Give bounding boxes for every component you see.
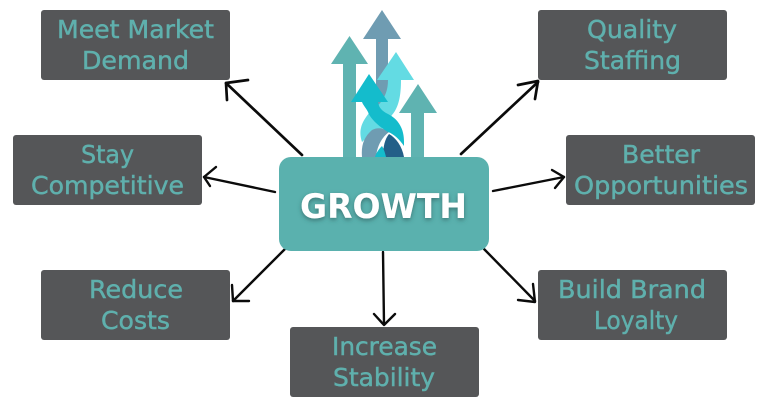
panel: central Growth box	[279, 157, 489, 251]
arrow: to Stay Competitive	[204, 167, 275, 192]
arrow: to Meet Market Demand	[226, 80, 302, 155]
panel: Build Brand Loyalty	[538, 270, 727, 340]
panel: Build Brand Loyalty: Loyalty	[594, 306, 678, 335]
arrow: to Increase Stability	[374, 252, 395, 325]
panel: Meet Market Demand: Meet Market	[57, 15, 214, 44]
panel: Quality Staffing	[538, 10, 727, 80]
panel: Increase Stability: Increase	[332, 332, 437, 361]
panel: Stay Competitive	[13, 135, 202, 205]
panel: Quality Staffing: Quality	[587, 15, 677, 44]
panel: Reduce Costs	[41, 270, 230, 340]
arrow: to Better Opportunities	[493, 170, 564, 191]
icon: growth arrows	[331, 10, 437, 157]
arrow: to Build Brand Loyalty	[484, 249, 535, 302]
panel: Better Opportunities: Better	[622, 140, 701, 169]
panel: Better Opportunities	[566, 135, 755, 205]
panel: Quality Staffing: Staffing	[584, 46, 681, 75]
arrow: to Reduce Costs	[232, 249, 285, 301]
panel: Build Brand Loyalty: Build Brand	[558, 275, 706, 304]
panel: Increase Stability	[290, 327, 479, 397]
panel: Meet Market Demand	[41, 10, 230, 80]
panel: Stay Competitive: Competitive	[31, 171, 184, 200]
panel: Reduce Costs: Costs	[101, 306, 170, 335]
panel: Better Opportunities: Opportunities	[574, 171, 748, 200]
panel: Meet Market Demand: Demand	[82, 46, 189, 75]
panel: central Growth box: GROWTH	[300, 187, 467, 227]
arrow: to Quality Staffing	[461, 81, 538, 154]
panel: Stay Competitive: Stay	[81, 140, 134, 169]
panel: Increase Stability: Stability	[333, 363, 435, 392]
panel: Reduce Costs: Reduce	[89, 275, 183, 304]
